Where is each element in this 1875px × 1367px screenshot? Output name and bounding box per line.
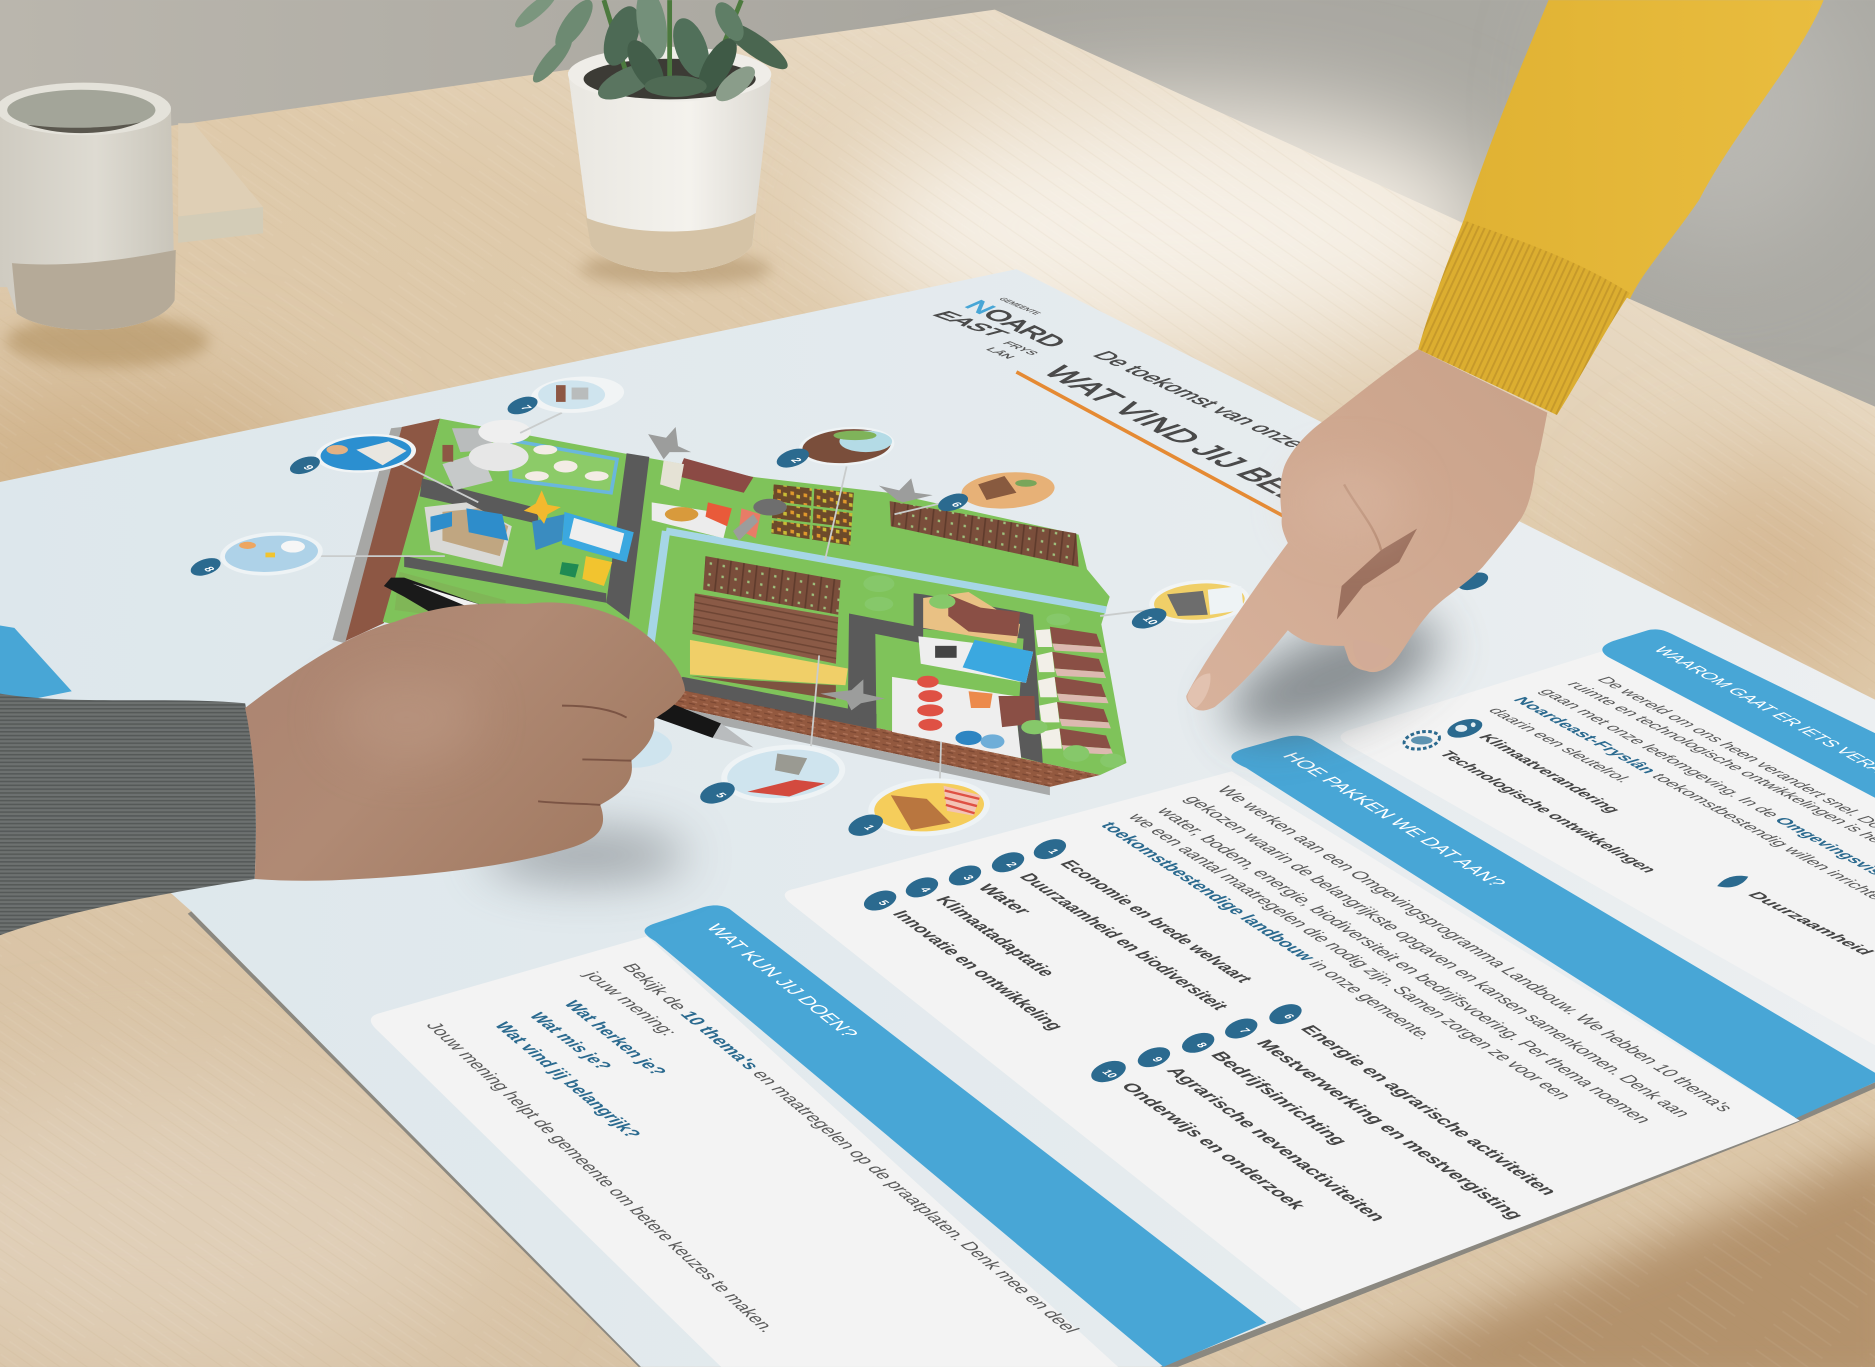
callout circle 1 xyxy=(846,774,992,840)
list of themes 1 to 5: 5 xyxy=(875,899,891,907)
list of themes 1 to 5 xyxy=(861,835,1257,1032)
list of themes 6 to 10 xyxy=(1088,1000,1562,1223)
list of themes 1 to 5: 2 xyxy=(1003,861,1019,869)
list of themes 6 to 10: 10 xyxy=(1099,1068,1120,1080)
water channel xyxy=(649,531,1106,652)
callout circle 2: 2 xyxy=(788,457,804,464)
book under mug xyxy=(178,123,263,243)
list of themes 1 to 5: Innovatie en ontwikkeling xyxy=(888,908,1068,1032)
left hand xyxy=(245,602,685,881)
callout circle 6: 6 xyxy=(948,501,964,509)
callout circle 7 xyxy=(505,374,625,418)
panel: waarom: daarin een sleutelrol. xyxy=(1484,706,1638,784)
list of themes 6 to 10: 7 xyxy=(1236,1027,1252,1035)
list of themes 6 to 10: Agrarische nevenactiviteiten xyxy=(1162,1065,1391,1223)
farmhouse and market stall xyxy=(652,458,761,538)
callout circle 10: 10 xyxy=(1139,615,1160,626)
callout circle 9: 9 xyxy=(300,464,316,472)
panel: waarom: Duurzaamheid xyxy=(1743,890,1875,956)
roads xyxy=(404,453,1043,763)
panel: wat kun jij doen: Bekijk de 10 thema's en maatregelen op de praatplaten. Denk mee en deel xyxy=(618,961,1084,1335)
right arm with yellow sleeve xyxy=(1186,0,1824,710)
list of themes 6 to 10: 9 xyxy=(1149,1056,1165,1064)
panel: wat kun jij doen: Wat vind jij belangrijk? xyxy=(490,1020,645,1140)
panel: hoe pakken we dat aan xyxy=(785,736,1875,1311)
terrace with umbrellas xyxy=(892,676,1036,758)
callout circle hidden behind hand xyxy=(596,727,672,768)
left hand and sleeve xyxy=(0,602,685,935)
list of themes 6 to 10: Energie en agrarische activiteiten xyxy=(1296,1023,1562,1197)
icon: climate xyxy=(1445,716,1484,741)
coffee mug xyxy=(0,83,209,367)
solar building xyxy=(425,502,512,567)
list of themes 1 to 5: 3 xyxy=(960,874,976,882)
list of themes 6 to 10: 6 xyxy=(1280,1013,1297,1021)
grey birds and drones xyxy=(648,427,933,710)
logo: FRYS xyxy=(999,341,1041,356)
panel: waarom xyxy=(1341,629,1875,1045)
row of houses xyxy=(1036,627,1113,755)
callout circle 5 xyxy=(697,740,848,808)
list of themes 6 to 10: Bedrijfsinrichting xyxy=(1206,1049,1352,1147)
logo: EAST xyxy=(926,310,1014,339)
ribbed cuff xyxy=(1418,220,1630,415)
callout circle 8: 8 xyxy=(200,565,217,573)
isometric farm illustration xyxy=(317,413,1199,795)
grey sleeve xyxy=(0,694,256,935)
panel: hoe pakken we dat aan: HOE PAKKEN WE DAT AAN? xyxy=(1278,750,1511,889)
list of themes 1 to 5: Klimaatadaptatie xyxy=(931,894,1060,978)
panel: wat kun jij doen xyxy=(371,905,1266,1367)
panel: hoe pakken we dat aan: We werken aan een Omgevingsprogramma Landbouw. We hebben 10 thema's xyxy=(1212,784,1738,1114)
callout circle 10 xyxy=(1129,577,1251,632)
panel: wat kun jij doen: Jouw mening helpt de gemeente om betere keuzes te maken. xyxy=(422,1020,780,1334)
callout lines xyxy=(317,413,1199,780)
logo: GEMEENTE xyxy=(997,297,1044,316)
callout circle 1: 1 xyxy=(860,824,877,832)
panel: hoe pakken we dat aan: we een aantal maatregelen die nodig zijn. Samen zorgen ze voor een xyxy=(1123,811,1576,1101)
blue framed building xyxy=(524,490,634,586)
fragment of header panel at left edge xyxy=(0,626,72,706)
callout circle 8 xyxy=(188,529,324,579)
list of themes 1 to 5: Economie en brede welvaart xyxy=(1056,858,1257,984)
list of themes 1 to 5: 1 xyxy=(1045,848,1061,856)
panel: wat kun jij doen: Wat mis je? xyxy=(525,1010,616,1072)
panel: waarom: Klimaatverandering xyxy=(1474,732,1626,814)
potted plant xyxy=(511,0,793,286)
title: De toekomst van onze landbouw xyxy=(1086,349,1405,493)
list of themes 6 to 10: Onderwijs en onderzoek xyxy=(1116,1081,1311,1212)
yellow sweater sleeve xyxy=(1464,0,1824,299)
list of themes 6 to 10: 8 xyxy=(1193,1041,1209,1049)
pen xyxy=(384,578,753,747)
fields xyxy=(395,484,1079,700)
callout circle 9 xyxy=(288,431,417,477)
list of themes 1 to 5: 4 xyxy=(917,886,934,894)
central house xyxy=(918,592,1033,683)
panel: wat kun jij doen: WAT KUN JIJ DOEN? xyxy=(702,922,863,1039)
icon: leaf xyxy=(1717,876,1748,887)
panel: hoe pakken we dat aan: gekozen waarin de belangrijkste opgaven en kansen samenkomen. Denk aan xyxy=(1180,794,1695,1119)
shadow of hands on poster xyxy=(484,593,1455,881)
logo: LÂN xyxy=(982,346,1018,360)
panel: wat kun jij doen: jouw mening: xyxy=(579,969,682,1038)
farm base and soil sides xyxy=(332,419,1126,795)
panel: hoe pakken we dat aan: toekomstbestendige landbouw in onze gemeente. xyxy=(1096,820,1438,1042)
callout circle 5: 5 xyxy=(712,791,729,799)
panel: wat kun jij doen: Wat herken je? xyxy=(559,998,671,1077)
logo: NOARD xyxy=(958,298,1072,351)
icon: technology network xyxy=(1403,729,1441,752)
callout circle 7: 7 xyxy=(517,404,534,412)
list of themes 1 to 5: Duurzaamheid en biodiversiteit xyxy=(1015,871,1233,1012)
background: wall xyxy=(0,0,1875,502)
right hand with pointing finger xyxy=(1186,349,1547,710)
callout circle 2 xyxy=(774,424,896,471)
farm yard with cows xyxy=(442,420,617,493)
orange divider xyxy=(1016,372,1289,519)
logo xyxy=(926,297,1072,360)
callout circle 6 xyxy=(936,469,1056,515)
list of themes 1 to 5: Water xyxy=(973,882,1036,916)
title: WAT VIND JIJ BELANGRIJK? xyxy=(1034,363,1462,580)
panel: waarom: Technologische ontwikkelingen xyxy=(1435,749,1662,874)
trees xyxy=(863,575,1124,768)
panel: hoe pakken we dat aan: water, bodem, energie, biodiversiteit en bedrijfsvoering. Per thema noemen xyxy=(1152,805,1656,1125)
list of themes 6 to 10: Mestverwerking en mestvergisting xyxy=(1252,1038,1529,1221)
callout badge hidden behind right hand xyxy=(1456,569,1490,593)
